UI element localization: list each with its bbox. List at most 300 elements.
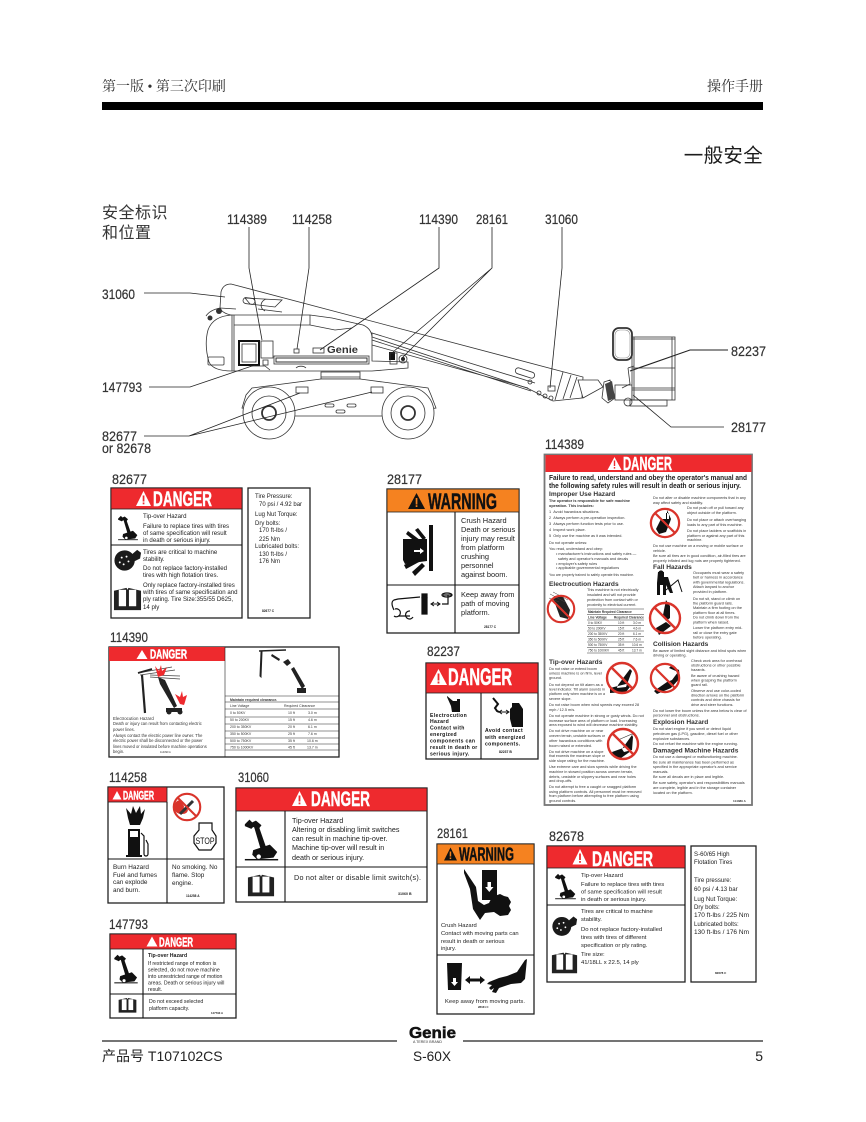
left column rules: This machine is not electrically bbox=[587, 588, 639, 592]
instruction text: No smoking. No bbox=[172, 864, 218, 871]
hazard text: 41/18LL x 22.5, 14 ply bbox=[581, 960, 639, 966]
left text: Hazard bbox=[430, 719, 449, 725]
danger header bbox=[111, 488, 242, 511]
hazard text: Tip-over Hazard bbox=[148, 953, 187, 959]
decal: 82678 tire specs: 170 ft-lbs / 225 Nm bbox=[694, 913, 749, 919]
decal: 147793: 147793 bbox=[109, 916, 148, 932]
left column rules: • employer's safety rules bbox=[556, 562, 597, 566]
clearance table: 750 to 1000KV bbox=[588, 648, 610, 652]
left text: result in death or bbox=[430, 745, 478, 751]
clearance table: Maintain required clearance. bbox=[230, 698, 277, 702]
icon: keep away bbox=[392, 593, 452, 619]
right column rules: Be aware of limited sight distance and blind spots when bbox=[653, 649, 746, 653]
instruction text: 114258 A bbox=[186, 894, 200, 898]
left column rules: The operator is responsible for safe machine bbox=[549, 499, 630, 503]
right column rules: Do not alter or disable machine components that in any bbox=[653, 496, 746, 500]
diagram part numbers: 114258 bbox=[292, 211, 332, 227]
decal: 82677 tire specs: 225 Nm bbox=[259, 537, 280, 543]
decal: 82678 tire specs bbox=[691, 846, 756, 982]
clearance table: 35 ft bbox=[288, 739, 295, 743]
warning text: against boom. bbox=[461, 570, 507, 579]
burn text: and burn. bbox=[113, 887, 140, 894]
left column rules: 3 Always perform function tests prior to use. bbox=[549, 522, 624, 526]
icon: tip-over bbox=[245, 820, 278, 860]
danger header: DANGER bbox=[623, 454, 672, 474]
hazard text: Tire size: bbox=[581, 952, 605, 958]
right column rules: the platform guard rails. bbox=[693, 602, 733, 606]
right column rules: are complete, legible and in the storage container bbox=[653, 786, 737, 790]
warning text: injury may result bbox=[461, 534, 515, 543]
right column rules: 114389 A bbox=[733, 799, 747, 803]
hazard text: death or serious injury. bbox=[292, 853, 364, 862]
hazard text bbox=[148, 953, 224, 1015]
tip-over hazards text: unless machine is on firm, level bbox=[549, 672, 602, 676]
decal: 82677 tire specs: Dry bolts: bbox=[255, 521, 281, 527]
warning text bbox=[461, 516, 516, 629]
tip-over hazards text: side slope rating for the machine. bbox=[549, 759, 605, 763]
crush text: injury. bbox=[441, 946, 456, 952]
icon: explosion and fuel pump bbox=[126, 806, 148, 857]
header left text: 第一版 • 第三次印刷 bbox=[102, 79, 226, 95]
right column rules: Be sure all decals are in place and legible. bbox=[653, 775, 724, 779]
intro statement bbox=[549, 474, 747, 490]
diagram part numbers bbox=[102, 211, 766, 456]
decal: 82677 tire specs: 176 Nm bbox=[259, 559, 280, 565]
tip-over hazards text: uneven terrain, unstable surfaces or bbox=[549, 734, 606, 738]
decal: 82678 bbox=[547, 828, 685, 982]
keep away text: Keep away from moving parts. bbox=[445, 999, 525, 1005]
clearance table: 20 ft bbox=[618, 632, 624, 636]
hazard text: Failure to replace tires with tires bbox=[581, 882, 664, 888]
tip-over hazards text: level indicator. Tilt alarm sounds in bbox=[549, 688, 605, 692]
tip-over hazards text: ground controls. bbox=[549, 799, 576, 803]
hazard text: Tip-over Hazard bbox=[581, 873, 623, 879]
left text: lines moved or insulated before machine operations bbox=[113, 744, 207, 749]
hazard text: stability. bbox=[581, 917, 602, 923]
machine diagram bbox=[206, 284, 675, 439]
left text: Always contact the electric power line owner. The bbox=[113, 733, 203, 738]
clearance table: 200 to 350KV bbox=[230, 725, 252, 729]
right column rules: loads to any part of this machine. bbox=[687, 523, 743, 527]
icon: tip-over bbox=[114, 955, 138, 983]
right column rules: located on the platform. bbox=[653, 791, 693, 795]
icon: tire bbox=[552, 916, 577, 936]
platform bbox=[613, 328, 675, 406]
decal: 28161 bbox=[437, 825, 534, 1014]
hazard text: Machine tip-over will result in bbox=[292, 843, 384, 852]
chassis bbox=[242, 372, 436, 416]
right text: with energized bbox=[484, 735, 525, 741]
decal: 82678 tire specs: Lug Nut Torque: bbox=[694, 896, 738, 903]
crush text bbox=[441, 923, 519, 952]
right column rules: obstructions or other possible bbox=[691, 664, 741, 668]
decal: 82237 bbox=[426, 643, 538, 759]
right text: Avoid contact bbox=[485, 728, 523, 734]
right column rules: Do not refuel the machine with the engine running. bbox=[653, 742, 738, 746]
right column rules: explosive substances. bbox=[653, 737, 690, 741]
decal: 31060: 31060 bbox=[238, 769, 269, 785]
right column rules: Fall Hazards bbox=[653, 564, 692, 571]
electrocution icon bbox=[548, 592, 574, 622]
clearance table: 4.6 m bbox=[633, 626, 641, 630]
clearance table: 50 to 200KV bbox=[230, 718, 250, 722]
instruction text: Do not alter or disable limit switch(s). bbox=[294, 873, 421, 882]
right column rules: Do not lower the boom unless the area below is clear of bbox=[653, 709, 747, 713]
header black bar bbox=[102, 102, 763, 110]
icon: manual bbox=[552, 953, 577, 973]
hazard text: Do not replace factory-installed bbox=[581, 927, 662, 933]
hazard text: ply rating. Tire Size:355/55 D625, bbox=[143, 596, 233, 603]
instruction text bbox=[294, 873, 421, 896]
clearance table: 50 to 200KV bbox=[588, 626, 606, 630]
left column rules: insulated and will not provide bbox=[587, 593, 636, 597]
danger header bbox=[109, 646, 225, 662]
left text: Death or injury can result from contacting electric bbox=[113, 721, 202, 726]
icon: hand bbox=[447, 696, 460, 712]
right column rules: machine. bbox=[687, 538, 702, 542]
clearance table: 350 to 500KV bbox=[230, 732, 252, 736]
hazard text: areas. Death or serious injury will bbox=[148, 980, 224, 986]
clearance table: 7.6 m bbox=[308, 732, 317, 736]
logo: A TEREX BRAND bbox=[413, 1040, 443, 1044]
diagram part numbers: 28177 bbox=[731, 419, 766, 435]
danger header bbox=[547, 846, 685, 871]
decal: 147793 bbox=[109, 916, 236, 1018]
decal: 82677: 82677 bbox=[112, 471, 147, 487]
decal: 114389: 114389 bbox=[545, 436, 584, 452]
warning text: path of moving bbox=[461, 599, 509, 608]
danger header: DANGER bbox=[159, 934, 193, 950]
model: S-60X bbox=[413, 1048, 452, 1064]
warning text: Crush Hazard bbox=[461, 516, 507, 525]
clearance table: 45 ft bbox=[618, 648, 624, 652]
left text: Contact with bbox=[430, 726, 465, 732]
burn text: can explode bbox=[113, 879, 148, 886]
decal: 114389 bbox=[544, 436, 752, 805]
decal: 28177 bbox=[387, 471, 519, 633]
clearance table: 3.0 m bbox=[308, 711, 317, 715]
danger header: DANGER bbox=[448, 664, 512, 691]
section heading: 和位置 bbox=[102, 224, 152, 242]
left text: begin. bbox=[113, 749, 124, 754]
left text: power lines. bbox=[113, 727, 135, 732]
tip-over hazards text: Do not drive machine on a slope bbox=[549, 750, 603, 754]
danger header: DANGER bbox=[123, 788, 154, 802]
keep away text bbox=[445, 999, 525, 1009]
icon: stop: STOP bbox=[196, 836, 214, 846]
tip-over hazards text: that exceeds the maximum slope or bbox=[549, 754, 606, 758]
decal: 82677 tire specs: Lug Nut Torque: bbox=[255, 512, 298, 518]
left column rules: • manufacturer's instructions and safety rules — bbox=[556, 552, 637, 556]
diagram part numbers: 31060 bbox=[545, 211, 578, 227]
clearance table bbox=[230, 698, 318, 750]
diagram part numbers: 114390 bbox=[419, 211, 458, 227]
clearance table: 20 ft bbox=[288, 725, 295, 729]
section heading bbox=[102, 204, 168, 242]
right column rules: specified in the appropriate operator's and service bbox=[653, 765, 737, 769]
warning header bbox=[387, 489, 519, 514]
clearance table bbox=[587, 609, 644, 653]
right column rules: Do not climb down from the bbox=[693, 616, 739, 620]
hazard text: Do not exceed selected bbox=[149, 999, 203, 1005]
hazard text: of same specification will result bbox=[581, 890, 662, 896]
right column rules: Observe and use color-coded bbox=[691, 689, 741, 693]
diagram part numbers: 147793 bbox=[102, 379, 142, 395]
icon: electrocution boom bbox=[138, 665, 187, 714]
clearance table: Line Voltage bbox=[588, 616, 607, 620]
tip-over hazards text: using platform controls. All personnel must be removed bbox=[549, 790, 641, 794]
hazard text: Tires are critical to machine bbox=[581, 909, 654, 915]
left column rules: Do not operate unless: bbox=[549, 541, 587, 545]
hazard text: Altering or disabling limit switches bbox=[292, 825, 400, 834]
clearance table: 10 ft bbox=[618, 621, 624, 625]
decal: 82678 tire specs: 130 ft-lbs / 176 Nm bbox=[694, 930, 749, 936]
decal: 114258: 114258 bbox=[109, 769, 147, 785]
left column rules: 4 Inspect work place. bbox=[549, 528, 586, 532]
left text bbox=[113, 716, 207, 754]
hazard text: platform capacity. bbox=[149, 1006, 189, 1012]
hazard text: can result in machine tip-over. bbox=[292, 834, 387, 843]
right column rules: Be aware of crushing hazard bbox=[691, 674, 739, 678]
boom bbox=[220, 284, 583, 401]
right column icons bbox=[650, 509, 682, 694]
clearance table: 0 to 50KV bbox=[588, 621, 603, 625]
hazard text: Only replace factory-installed tires bbox=[143, 582, 235, 589]
right column rules: Do not place or attach overhanging bbox=[687, 518, 746, 522]
clearance table: 13.7 m bbox=[632, 648, 642, 652]
right column rules: provided in platform. bbox=[693, 590, 727, 594]
right column rules: direction arrows on the platform bbox=[691, 694, 744, 698]
tip-over hazards text: ground. bbox=[549, 676, 562, 680]
clearance table: 45 ft bbox=[288, 746, 295, 750]
decal: 82677 tire specs: 130 ft-lbs / bbox=[259, 552, 287, 558]
diagram part numbers: 28161 bbox=[476, 211, 508, 227]
hazard text: stability. bbox=[143, 556, 165, 563]
right column rules: drive and steer functions. bbox=[691, 703, 733, 707]
left wheel bbox=[243, 387, 295, 439]
icon: tip-over bbox=[555, 874, 576, 899]
danger header bbox=[236, 788, 427, 811]
hazard text: Tip-over Hazard bbox=[292, 816, 343, 825]
right column rules: belt or harness in accordance bbox=[693, 576, 743, 580]
page title: 一般安全 bbox=[684, 145, 763, 167]
tip-over hazards text: increase surface area of platform or load. Increasing bbox=[549, 719, 637, 723]
footer rules bbox=[102, 1040, 763, 1042]
header right text: 操作手册 bbox=[707, 78, 763, 95]
instruction text bbox=[172, 864, 218, 898]
clearance table: Line Voltage bbox=[230, 704, 249, 708]
decal: 31060 bbox=[236, 769, 427, 902]
clearance table: 10.6 m bbox=[632, 643, 642, 647]
decal: 82677 bbox=[111, 471, 242, 618]
clearance table: 3.0 m bbox=[633, 621, 641, 625]
decal: 82678 tire specs: Flotation Tires bbox=[694, 859, 732, 866]
hazard text: Tires are critical to machine bbox=[143, 549, 218, 556]
clearance table: 6.1 m bbox=[308, 725, 317, 729]
hazard text: Tip-over Hazard bbox=[143, 513, 186, 520]
clearance table: 25 ft bbox=[288, 732, 295, 736]
danger header bbox=[546, 454, 752, 474]
right column rules: driving or operating. bbox=[653, 654, 687, 658]
left column rules: 1 Avoid hazardous situations. bbox=[549, 510, 600, 514]
diagram part numbers: 114389 bbox=[227, 211, 267, 227]
decal: 82678 tire specs: Tire pressure: bbox=[694, 877, 732, 884]
left column rules: You are properly trained to safely operate this machine. bbox=[549, 573, 634, 577]
left column rules: protection from contact with or bbox=[587, 598, 639, 602]
right column rules: Lower the platform entry mid- bbox=[693, 626, 743, 630]
icon: clearance boom bbox=[259, 650, 306, 693]
hazard text: into unrestricted range of motion bbox=[148, 974, 223, 980]
clearance table: 10 ft bbox=[288, 711, 295, 715]
left text: energized bbox=[430, 732, 457, 738]
hazard text bbox=[292, 816, 400, 862]
danger header: DANGER bbox=[150, 646, 187, 662]
left column rules: 5 Only use the machine as it was intended. bbox=[549, 534, 622, 538]
burn text: Fuel and fumes bbox=[113, 872, 157, 879]
right text: 82237 B bbox=[499, 750, 512, 754]
right column rules: before operating. bbox=[693, 636, 722, 640]
crush text: Crush Hazard bbox=[441, 923, 477, 929]
hazard text: with tires of same specification and bbox=[142, 589, 238, 596]
right column rules: Do not sit, stand or climb on bbox=[693, 597, 740, 601]
right column rules: Damaged Machine Hazards bbox=[653, 748, 739, 754]
tip-over hazards text: Tip-over Hazards bbox=[549, 659, 603, 666]
right column rules bbox=[653, 496, 747, 803]
clearance table: Required Clearance bbox=[614, 616, 644, 620]
icon: keep away from moving parts bbox=[447, 959, 527, 993]
clearance table: 6.1 m bbox=[633, 632, 641, 636]
danger header: DANGER bbox=[153, 488, 212, 511]
decal: 82678: 82678 bbox=[549, 828, 584, 844]
right column rules: platform floor at all times. bbox=[693, 611, 735, 615]
hazard text: tires with high flotation tires. bbox=[143, 572, 218, 579]
right column rules: Be sure safety, operator's and responsibilities manuals bbox=[653, 781, 745, 785]
keep away text: 28161 C bbox=[478, 1005, 489, 1009]
right column rules: guard rail. bbox=[691, 683, 708, 687]
left column rules: operation. This includes: bbox=[549, 504, 594, 508]
tip-over hazards text: Do not raise boom when wind speeds may exceed 28 bbox=[549, 703, 639, 707]
tip-over hazards text: boom raised or extended. bbox=[549, 744, 592, 748]
left column rules: • applicable governmental regulations bbox=[556, 566, 619, 570]
decal: 82678 tire specs: Lubricated bolts: bbox=[694, 921, 739, 928]
clearance table: 4.6 m bbox=[308, 718, 317, 722]
leader lines bbox=[144, 227, 728, 436]
hazard text: result. bbox=[148, 987, 162, 993]
crush text: Contact with moving parts can bbox=[441, 931, 519, 937]
left text: Electrocution bbox=[430, 713, 467, 719]
decal: 114390 bbox=[109, 629, 339, 757]
left column rules: proximity to electrical current. bbox=[587, 603, 636, 607]
clearance table: 350 to 500KV bbox=[588, 638, 608, 642]
clearance table: 13.7 m bbox=[307, 746, 318, 750]
right wheel bbox=[382, 387, 434, 439]
icon: manual bbox=[248, 875, 274, 896]
right column rules: Explosion Hazard bbox=[653, 719, 708, 726]
hazard text: If restricted range of motion is bbox=[148, 961, 217, 967]
tip-over hazards text: machine in stowed position across uneven terrain, bbox=[549, 770, 633, 774]
diagram part numbers: 82237 bbox=[731, 343, 766, 359]
tip-over hazards text: from platform before attempting to free platform using bbox=[549, 794, 639, 798]
right column rules: vehicle. bbox=[653, 549, 666, 553]
decal: 82677 tire specs: Tire Pressure: bbox=[255, 494, 293, 500]
hazard text bbox=[581, 873, 664, 966]
right column rules: petroleum gas (LPG), gasoline, diesel fuel or other bbox=[653, 732, 739, 736]
danger header: DANGER bbox=[311, 788, 370, 811]
decal: 114258 bbox=[108, 769, 224, 903]
right column rules: Do not place ladders or scaffolds in bbox=[687, 529, 746, 533]
decal: 82237: 82237 bbox=[427, 643, 460, 659]
icon: tire bbox=[114, 550, 141, 571]
hazard text: of same specification will result bbox=[143, 530, 227, 537]
warning text: from platform bbox=[461, 543, 505, 552]
instruction text: 31060 B bbox=[398, 892, 412, 896]
right column rules: rail or close the entry gate bbox=[693, 631, 737, 635]
decal: 82677 tire specs: Lubricated bolts: bbox=[255, 544, 299, 550]
tip-over hazards text: Do not raise or extend boom bbox=[549, 667, 597, 671]
right column rules: Collision Hazards bbox=[653, 641, 709, 648]
right column rules: Do not start engine if you smell or detect liquid bbox=[653, 727, 731, 731]
clearance table: 7.6 m bbox=[633, 638, 641, 642]
right column rules: with governmental regulations. bbox=[693, 580, 744, 584]
left column rules: 2 Always perform a pre-operation inspection. bbox=[549, 516, 625, 520]
warning header: WARNING bbox=[428, 489, 497, 514]
right text bbox=[484, 728, 525, 754]
tip-over prohibition icons bbox=[607, 663, 638, 759]
right column rules: Maintain a firm footing on the bbox=[693, 606, 742, 610]
right column rules: Do not use a damaged or malfunctioning machine. bbox=[653, 755, 738, 759]
right column rules: properly inflated and lug nuts are properly tightened. bbox=[653, 559, 741, 563]
icon: no smoking bbox=[174, 794, 200, 820]
decal: 82678 tire specs: Dry bolts: bbox=[694, 904, 720, 911]
clearance table: 35 ft bbox=[618, 643, 624, 647]
clearance table: 750 to 1000KV bbox=[230, 746, 254, 750]
clearance table: 15 ft bbox=[288, 718, 295, 722]
clearance table: Required Clearance bbox=[284, 704, 315, 708]
tip-over hazards text: other hazardous conditions with bbox=[549, 739, 602, 743]
decal: 82678 tire specs: S-60/65 High bbox=[694, 851, 730, 858]
tip-over hazards text: Use extreme care and slow speeds while driving the bbox=[549, 765, 637, 769]
right column rules: platform or against any part of this bbox=[687, 534, 745, 538]
warning text: platform. bbox=[461, 608, 490, 617]
icon: crush hand bbox=[464, 869, 511, 920]
left text: Electrocution Hazard bbox=[113, 716, 154, 721]
left text: electric power shall be disconnected or the power bbox=[113, 738, 203, 743]
right column rules: when grasping the platform bbox=[691, 678, 737, 682]
instruction text: engine. bbox=[172, 880, 193, 887]
tip-over hazards text: mph / 12.5 m/s. bbox=[549, 708, 575, 712]
danger header: DANGER bbox=[592, 848, 653, 871]
tip-over hazards text: platform only when machine is on a bbox=[549, 692, 606, 696]
clearance table: 15 ft bbox=[618, 626, 624, 630]
decal: 28177: 28177 bbox=[387, 471, 422, 487]
left text: components can bbox=[430, 738, 475, 744]
left column rules bbox=[549, 491, 639, 607]
clearance table: Maintain Required Clearance bbox=[588, 610, 632, 614]
clearance table: 200 to 350KV bbox=[588, 632, 608, 636]
tip-over hazards text: area exposed to wind will decrease machine stability. bbox=[549, 723, 638, 727]
tip-over hazards text: Do not operate machine in strong or gusty winds. Do not bbox=[549, 714, 645, 718]
hazard text: in death or serious injury. bbox=[581, 897, 647, 903]
logo: Genie bbox=[409, 1025, 456, 1042]
page number: 5 bbox=[755, 1048, 763, 1064]
icon: manual bbox=[119, 998, 136, 1013]
right column rules: hazards. bbox=[691, 668, 706, 672]
left column rules: safety and operator's manuals and decals bbox=[558, 557, 628, 561]
warning text: crushing bbox=[461, 552, 489, 561]
diagram part numbers: 82677 bbox=[102, 428, 137, 444]
crush text: result in death or serious bbox=[441, 939, 505, 945]
burn text: Burn Hazard bbox=[113, 864, 149, 871]
